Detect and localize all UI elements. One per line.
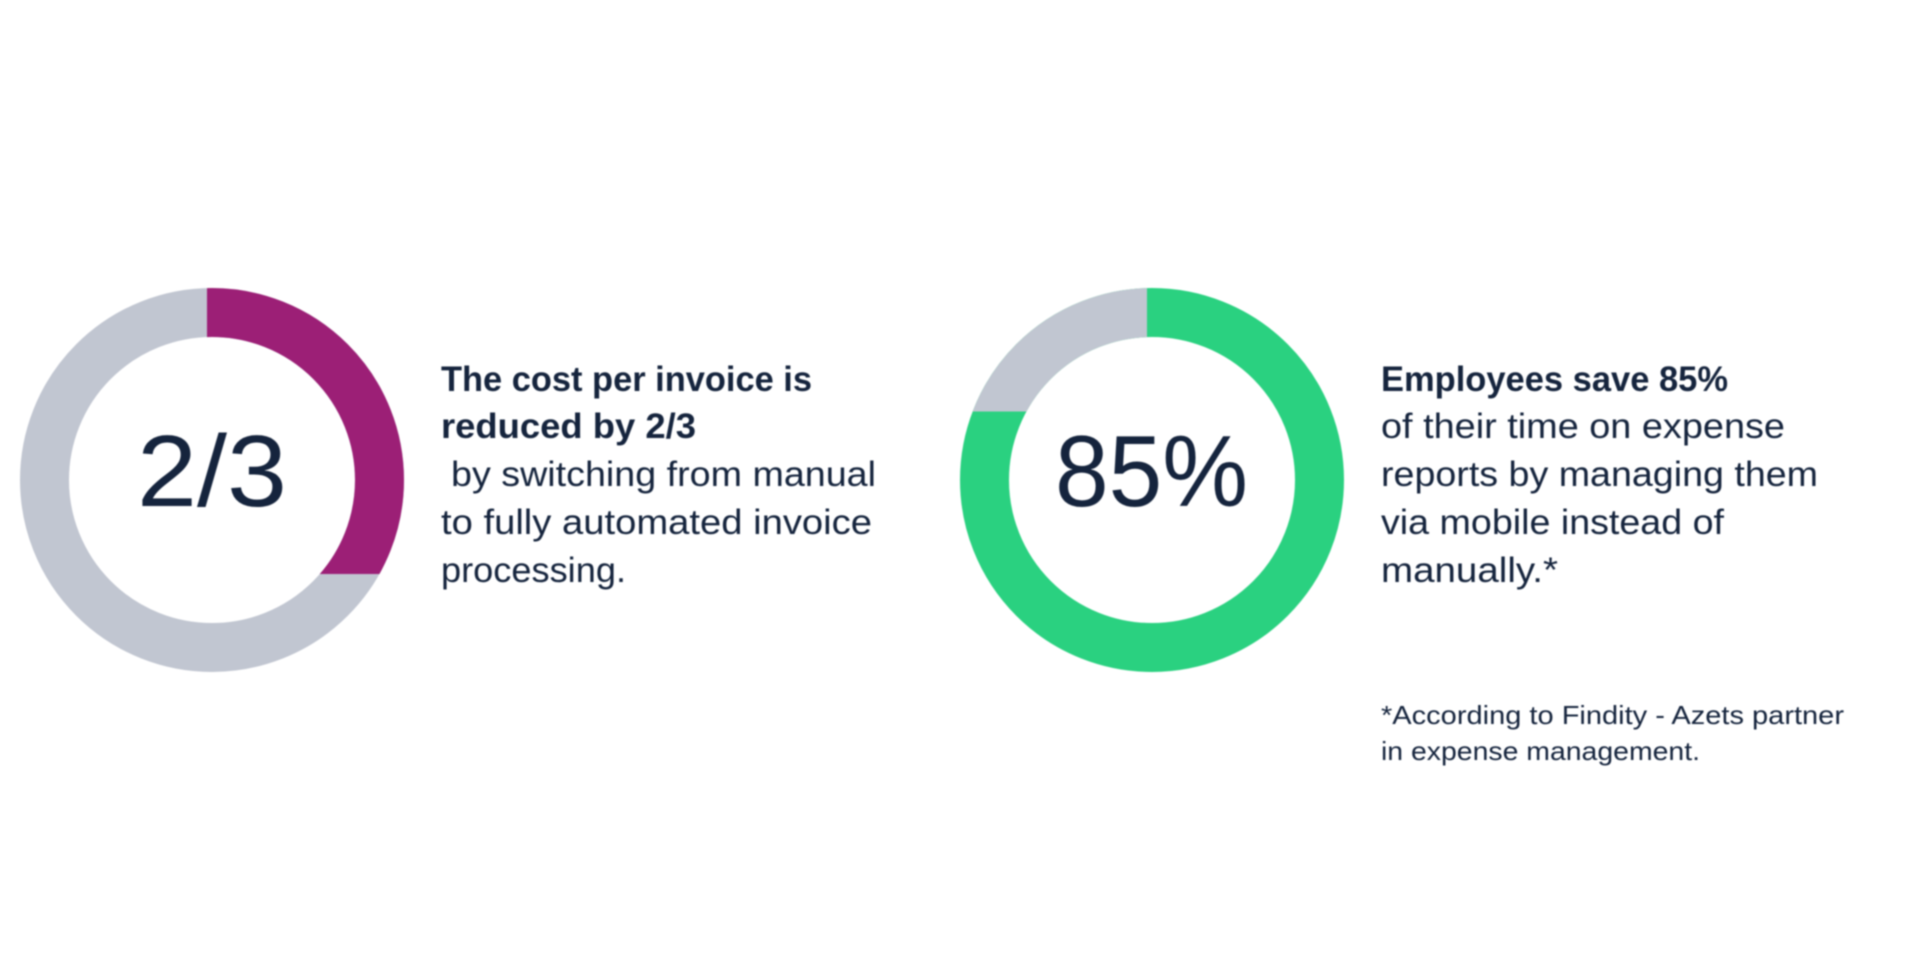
text block: invoice cost description: reduced by 2/3 bbox=[441, 407, 696, 446]
text block: employee savings description: Employees save 85% bbox=[1381, 360, 1728, 399]
donut chart: 85 percent bbox=[984, 312, 1320, 648]
donut value: 2/3: 2/3 bbox=[137, 416, 287, 528]
panel: cost per invoice bbox=[44, 312, 876, 648]
text block: invoice cost description: to fully automated invoice bbox=[441, 503, 872, 542]
text block: employee savings description: manually.* bbox=[1381, 551, 1558, 590]
footnote: source: *According to Findity - Azets partner bbox=[1381, 700, 1844, 730]
panel: employee time savings bbox=[984, 312, 1844, 766]
footnote: source: in expense management. bbox=[1381, 736, 1700, 766]
text block: invoice cost description: The cost per invoice is bbox=[441, 360, 812, 399]
donut value: 85%: 85% bbox=[1055, 416, 1248, 528]
text block: employee savings description bbox=[1381, 360, 1818, 590]
text block: invoice cost description bbox=[441, 360, 876, 590]
donut chart: two thirds bbox=[44, 312, 380, 648]
text block: employee savings description: reports by managing them bbox=[1381, 455, 1818, 494]
text block: employee savings description: of their time on expense bbox=[1381, 407, 1785, 446]
text block: invoice cost description: processing. bbox=[441, 551, 626, 590]
text block: employee savings description: via mobile instead of bbox=[1381, 503, 1724, 542]
footnote: source bbox=[1381, 700, 1844, 766]
text block: invoice cost description: by switching from manual bbox=[451, 455, 876, 494]
